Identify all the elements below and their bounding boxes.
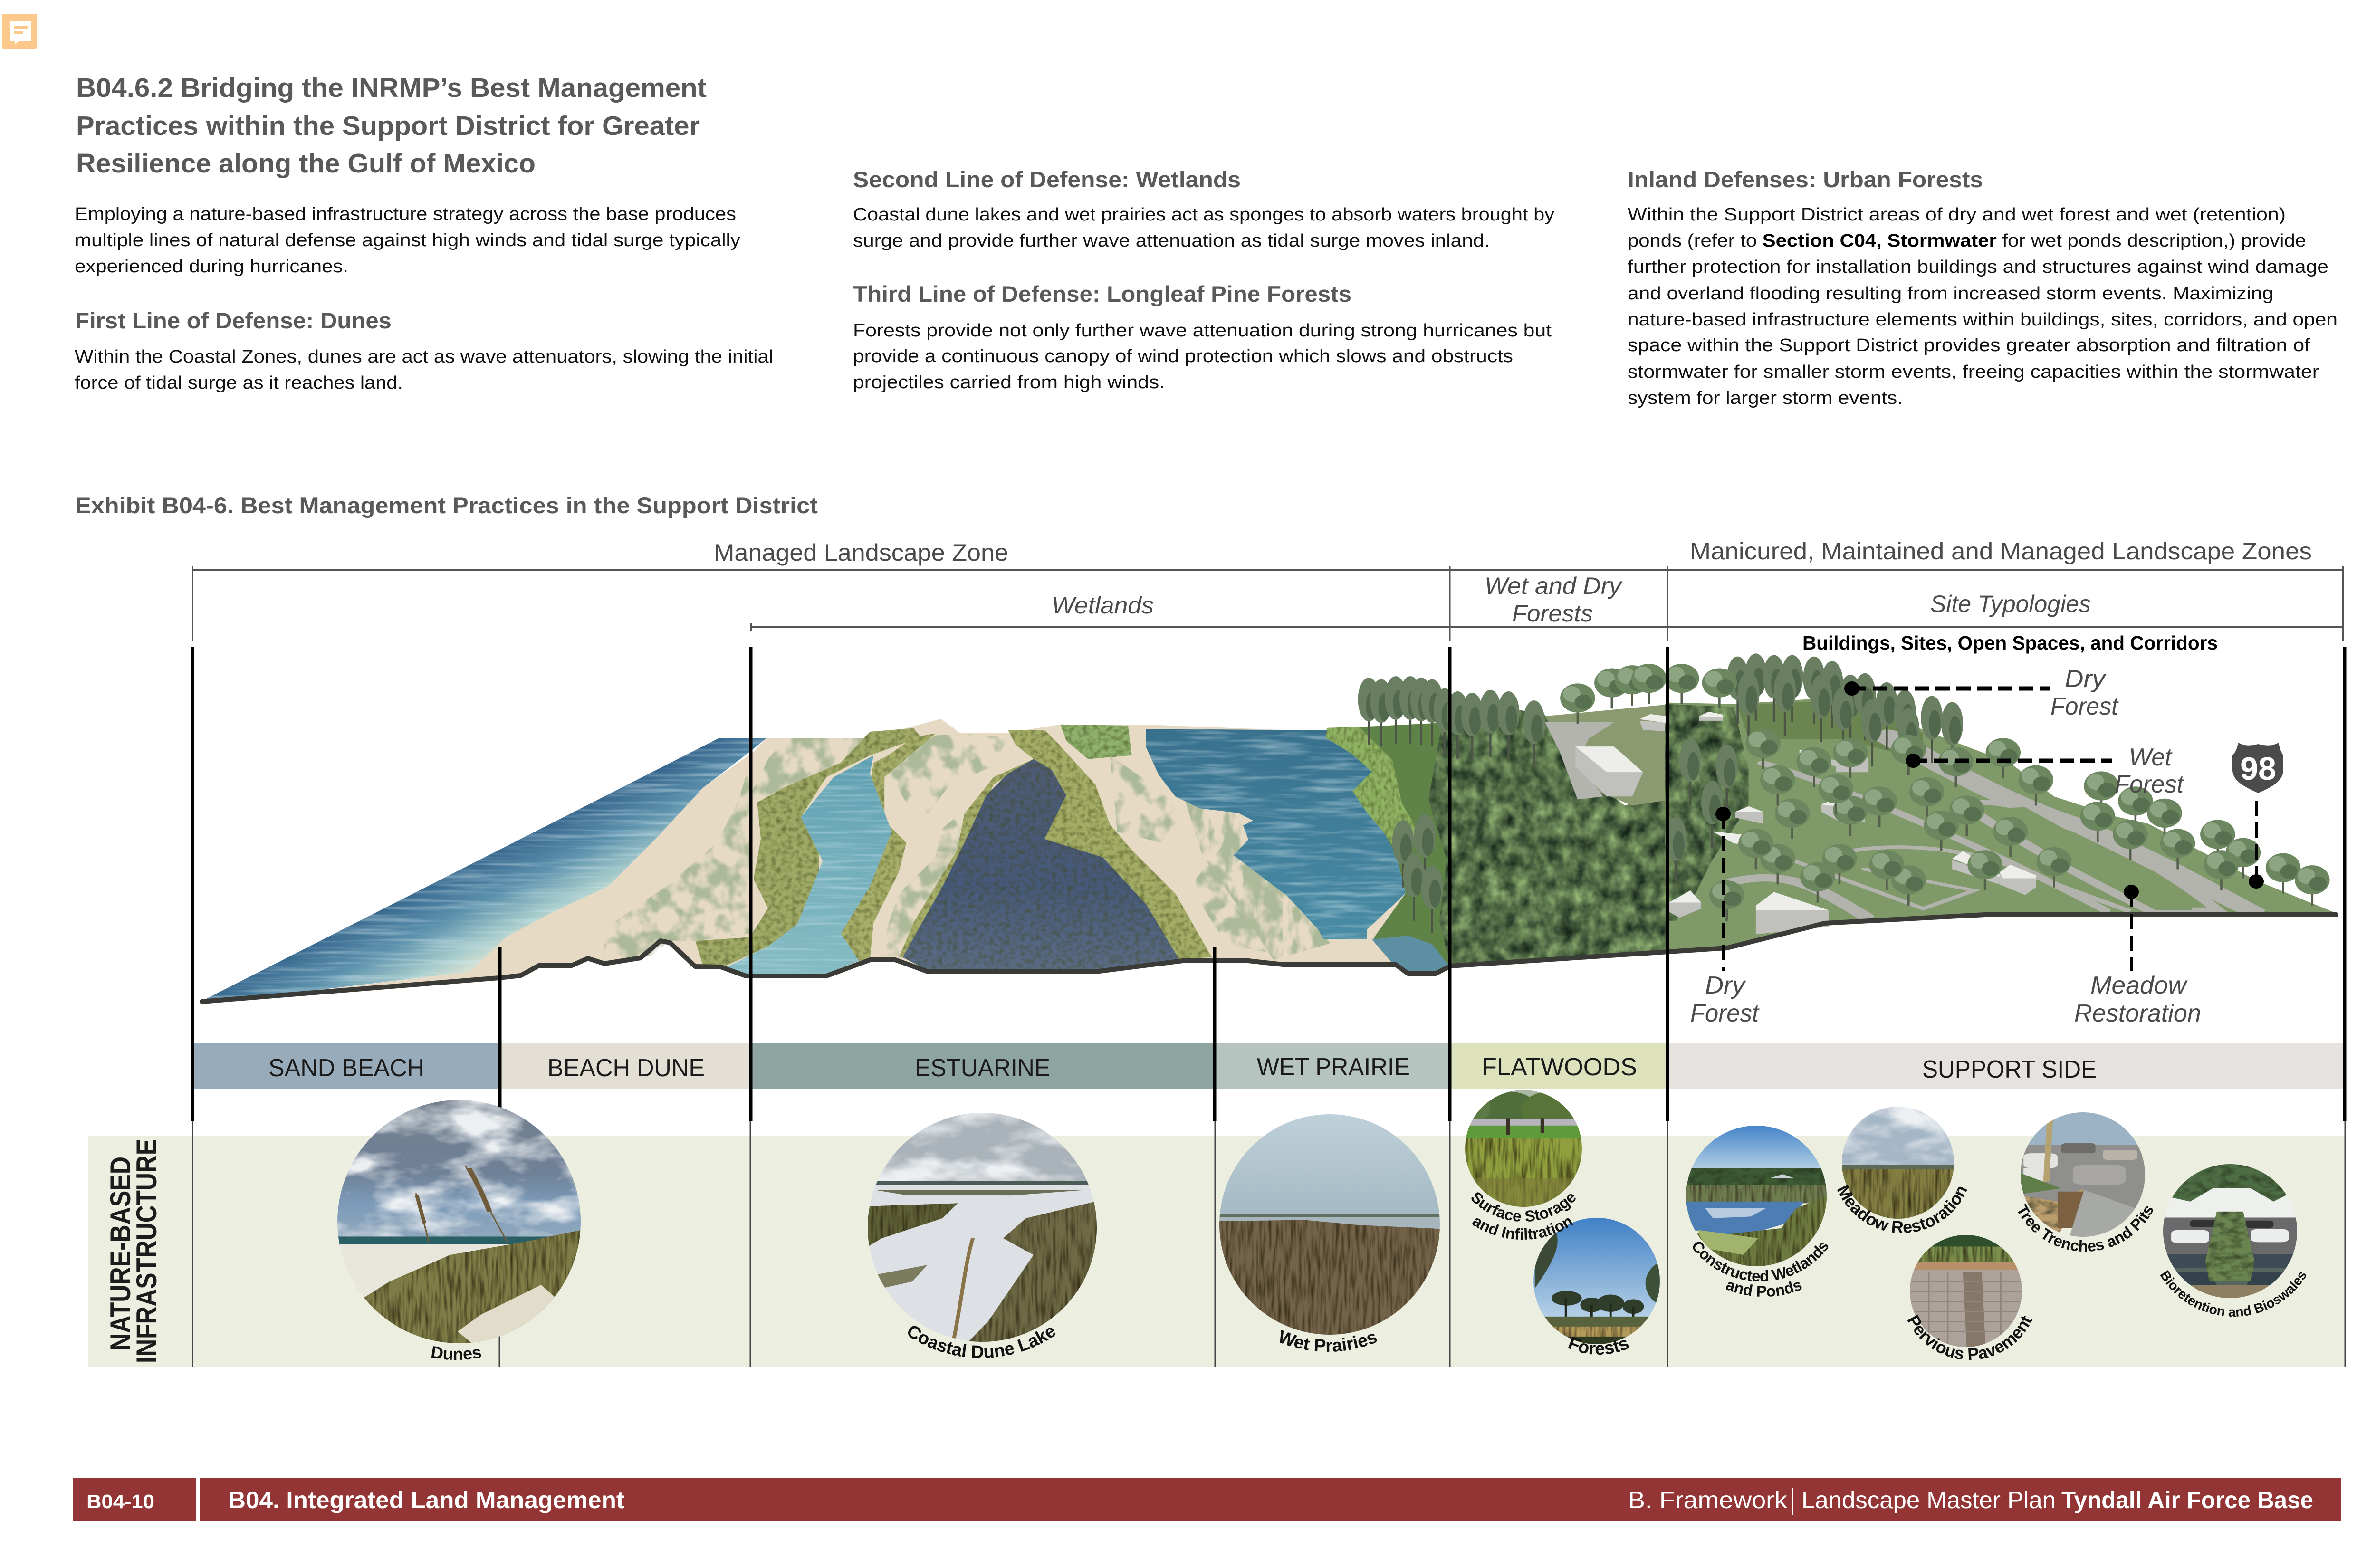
caption: dunes: Dunes	[430, 1342, 483, 1364]
zone labels: Manicured, Maintained and Managed Landscape Zones	[1690, 538, 2312, 564]
dune grass by the lake	[1178, 779, 1331, 960]
caption: surface storage and infiltration: and Infiltration	[1469, 1212, 1576, 1243]
wetlands vegetation and water	[601, 725, 1283, 974]
photo: surface storage	[1463, 1088, 1584, 1209]
caption: surface storage and infiltration: Surface Storage	[1467, 1188, 1580, 1225]
photo: dunes	[337, 1100, 581, 1343]
footer bar: B04. Integrated Land Management	[228, 1487, 624, 1513]
footer bar: B. Framework	[1628, 1487, 1788, 1513]
photo: tree trenches and pits	[2016, 1111, 2148, 1238]
text: inland defenses: ponds (refer to Section C04, Stormwater for wet ponds description,) provide	[1628, 231, 2306, 251]
photo: constructed wetlands	[1683, 1123, 1830, 1268]
caption: forests: Forests	[1565, 1333, 1632, 1359]
caption: surface storage and infiltration	[1467, 1188, 1580, 1243]
forest ground and flatwoods	[1326, 722, 1454, 969]
callout labels: Restoration	[2074, 1000, 2201, 1027]
callout labels: Forest	[2050, 693, 2119, 720]
icon: highway 98 shield: 98	[2240, 751, 2276, 787]
text: inland defenses	[1628, 205, 2338, 408]
icon: comment note	[2, 14, 37, 49]
footer bar	[73, 1478, 2341, 1521]
caption: tree trenches and pits: Tree Trenches and Pits	[2013, 1202, 2157, 1255]
heading: third line of defense: Third Line of Defense: Longleaf Pine Forests	[853, 281, 1351, 306]
exhibit heading: Exhibit B04-6. Best Management Practices in the Support District	[75, 493, 818, 518]
panel label: nature-based infrastructure: NATURE-BASED	[105, 1157, 136, 1351]
text: inland defenses: and overland flooding resulting from increased storm events. Maximizing	[1628, 284, 2273, 304]
photo: pervious pavement	[1906, 1233, 2027, 1350]
landscape zone bars: ESTUARINE	[915, 1054, 1050, 1082]
callout labels: Forest	[2115, 771, 2185, 798]
text: first line of defense: force of tidal surge as it reaches land.	[75, 373, 403, 393]
zone brackets	[192, 566, 2343, 641]
zone labels: Buildings, Sites, Open Spaces, and Corridors	[1802, 632, 2218, 654]
icon: highway 98 shield	[2232, 743, 2283, 793]
text: inland defenses: further protection for installation buildings and structures against wind damage	[1628, 257, 2328, 277]
sand base	[204, 719, 1407, 1001]
title	[76, 73, 707, 179]
text: inland defenses: Within the Support District areas of dry and wet forest and wet (retention)	[1628, 205, 2286, 225]
landscape section illustration	[202, 653, 2336, 1002]
text: first line of defense: Within the Coastal Zones, dunes are act as wave attenuators, slowing the initial	[75, 347, 773, 367]
zone labels: Managed Landscape Zone	[714, 539, 1008, 566]
zone labels	[714, 538, 2312, 654]
text: inland defenses: system for larger storm events.	[1628, 388, 1903, 408]
text: third line of defense	[853, 321, 1552, 392]
zone divider lines	[192, 647, 2345, 1367]
photo: meadow restoration	[1838, 1105, 1955, 1221]
callout labels: Meadow	[2090, 972, 2188, 999]
caption: pervious pavement: Pervious Pavement	[1903, 1312, 2036, 1364]
landscape zone bars: SUPPORT SIDE	[1922, 1056, 2097, 1083]
intro paragraph: Employing a nature-based infrastructure strategy across the base produces	[75, 204, 736, 224]
flatwoods forest and site plan	[1358, 653, 2336, 966]
callout labels: Wet	[2129, 744, 2173, 771]
panel: nature-based infrastructure	[88, 1136, 2345, 1367]
photo: coastal dune lake	[868, 1113, 1097, 1342]
caption: constructed wetlands and ponds: Constructed Wetlands	[1688, 1237, 1832, 1285]
photo: forests	[1531, 1216, 1664, 1347]
title: Practices within the Support District for Greater	[76, 111, 700, 141]
callout labels: Dry	[1705, 972, 1746, 999]
text: third line of defense: Forests provide not only further wave attenuation during strong hurricanes but	[853, 321, 1552, 341]
landscape zone bars: SAND BEACH	[268, 1054, 424, 1082]
heading: first line of defense: First Line of Defense: Dunes	[75, 308, 392, 333]
landscape zone bars: FLATWOODS	[1482, 1053, 1637, 1081]
callout labels	[1690, 665, 2201, 1027]
text: second line of defense	[853, 205, 1554, 251]
heading: second line of defense: Second Line of Defense: Wetlands	[853, 167, 1241, 192]
text: inland defenses: stormwater for smaller storm events, freeing capacities within the stormwater	[1628, 362, 2319, 382]
photo: wet prairies	[1219, 1114, 1440, 1335]
photo: bioretention and bioswales	[2160, 1162, 2300, 1301]
text: second line of defense: surge and provide further wave attenuation as tidal surge moves inland.	[853, 231, 1490, 251]
intro paragraph	[75, 204, 740, 277]
text: second line of defense: Coastal dune lakes and wet prairies act as sponges to absorb waters brought by	[853, 205, 1554, 225]
text: third line of defense: projectiles carried from high winds.	[853, 373, 1165, 392]
callouts: leader dots and dashes	[1715, 681, 2264, 971]
zone labels: Wet and Dry	[1485, 573, 1623, 599]
text: inland defenses: space within the Support District provides greater absorption and filtration of	[1628, 335, 2310, 355]
heading: inland defenses: Inland Defenses: Urban Forests	[1628, 167, 1983, 192]
intro paragraph: multiple lines of natural defense against high winds and tidal surge typically	[75, 230, 740, 250]
footer bar: Tyndall Air Force Base	[2061, 1487, 2313, 1513]
footer bar: Landscape Master Plan	[1801, 1487, 2056, 1513]
text: inland defenses: nature-based infrastructure elements within buildings, sites, corridors, and open	[1628, 310, 2338, 330]
caption: meadow restoration: Meadow Restoration	[1833, 1182, 1971, 1237]
landscape zone bars	[192, 1043, 2345, 1089]
callout labels: Dry	[2065, 665, 2107, 693]
footer bar: B04-10	[86, 1491, 154, 1512]
landscape zone bars: WET PRAIRIE	[1257, 1053, 1410, 1081]
text: third line of defense: provide a continuous canopy of wind protection which slows and obstructs	[853, 346, 1513, 366]
zone labels: Forests	[1512, 600, 1593, 627]
intro paragraph: experienced during hurricanes.	[75, 257, 348, 277]
pine trees	[1358, 653, 1963, 933]
title: Resilience along the Gulf of Mexico	[76, 148, 536, 179]
sea	[202, 738, 766, 1001]
panel label: nature-based infrastructure	[105, 1139, 163, 1363]
zone labels: Site Typologies	[1930, 591, 2091, 617]
landscape zone bars: BEACH DUNE	[547, 1054, 705, 1082]
panel label: nature-based infrastructure: INFRASTRUCTURE	[131, 1139, 163, 1363]
caption: wet prairies: Wet Prairies	[1275, 1327, 1380, 1356]
ground profile line	[202, 915, 2336, 1002]
caption: constructed wetlands and ponds: and Ponds	[1724, 1275, 1804, 1300]
pond	[1372, 936, 1448, 972]
title: B04.6.2 Bridging the INRMP’s Best Management	[76, 73, 707, 103]
lake	[1146, 729, 1406, 939]
text: first line of defense	[75, 347, 773, 393]
caption: bioretention and bioswales: Bioretention and Bioswales	[2157, 1268, 2310, 1320]
deciduous trees	[1560, 664, 2330, 921]
callout labels: Forest	[1690, 1000, 1760, 1027]
caption: coastal dune lake: Coastal Dune Lake	[903, 1321, 1060, 1362]
zone labels: Wetlands	[1052, 592, 1154, 619]
